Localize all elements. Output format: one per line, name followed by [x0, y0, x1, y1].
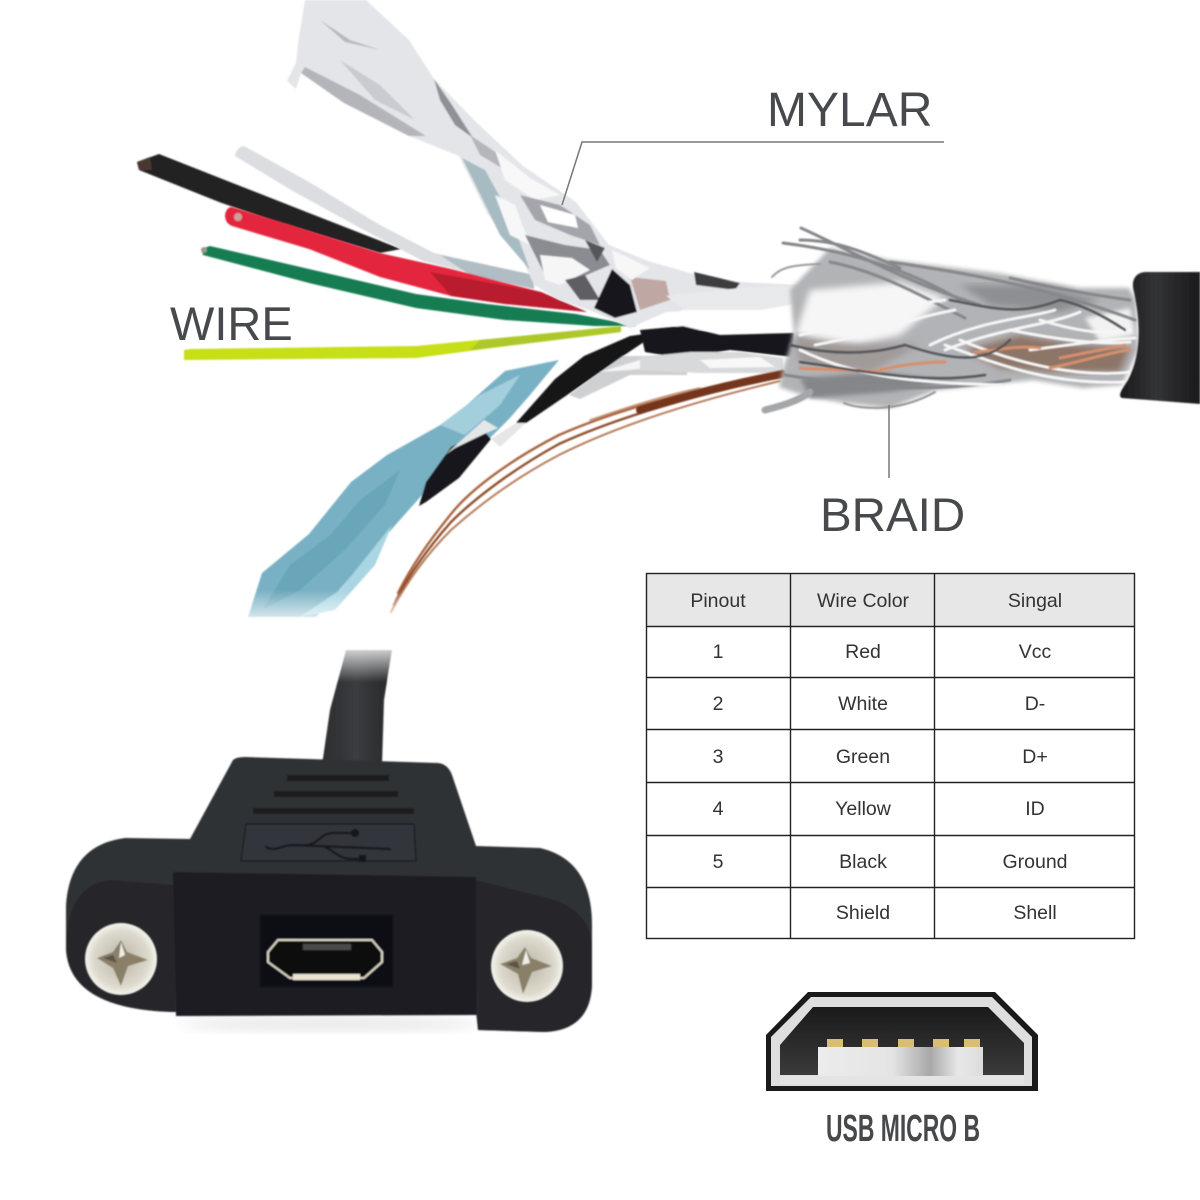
label: MYLAR — [562, 84, 944, 205]
label: USB MICRO B: USB MICRO B — [826, 1108, 980, 1150]
row 5: Black — [839, 851, 887, 873]
cable jacket — [1120, 272, 1200, 404]
row 6: Shell — [1013, 902, 1057, 924]
micro usb socket — [260, 915, 393, 987]
leader line: MYLAR — [562, 142, 944, 205]
foil: second black strip — [516, 332, 659, 423]
row 6 — [836, 902, 1057, 924]
row 4: 4 — [713, 798, 724, 820]
foil: creases — [301, 67, 426, 136]
connector shadow — [180, 1018, 480, 1030]
screw: left — [85, 923, 157, 995]
wire: red — [225, 207, 587, 312]
row 5: Ground — [1002, 851, 1068, 873]
row 4: Yellow — [835, 798, 892, 820]
header row — [690, 590, 1062, 612]
port pins — [827, 1039, 980, 1047]
icon: usb trident — [266, 830, 390, 861]
foil: blue-backed lower shield — [248, 332, 687, 617]
photo: panel mount connector — [66, 640, 592, 1032]
label: BRAID: BRAID — [820, 489, 965, 542]
row 2: White — [838, 693, 888, 715]
port cavity — [780, 1007, 1024, 1075]
foil: first black strip — [419, 431, 491, 506]
wire: black — [137, 154, 401, 253]
connector body — [66, 757, 592, 1032]
foil: black crumple — [594, 269, 637, 318]
row 6: Shield — [836, 902, 890, 924]
row 3: Green — [836, 746, 890, 768]
row 1: 1 — [713, 641, 723, 663]
header row: Wire Color — [817, 590, 910, 612]
row 4: ID — [1025, 798, 1045, 820]
row 5 — [713, 851, 1068, 873]
row 3 — [713, 746, 1048, 768]
port outline — [766, 992, 1038, 1091]
leader line: BRAID — [888, 405, 890, 478]
icon: USB Micro B port diagram — [766, 992, 1038, 1091]
row 1: Red — [845, 641, 881, 663]
row 1 — [713, 641, 1051, 663]
port metal shell — [771, 997, 1032, 1086]
front plate — [173, 872, 477, 1016]
foil: band under the crumple — [662, 310, 786, 330]
label: WIRE: WIRE — [170, 297, 293, 350]
row 5: 5 — [713, 851, 724, 873]
row 3: 3 — [713, 746, 723, 768]
header row: Pinout — [690, 590, 746, 612]
port tongue — [818, 1047, 983, 1083]
row 2: D- — [1025, 693, 1045, 715]
braid: tinned copper shield — [765, 228, 1138, 410]
pinout table — [646, 573, 1134, 938]
table header background — [646, 573, 1134, 626]
screw: right — [491, 930, 563, 1002]
label: MYLAR: MYLAR — [767, 84, 932, 137]
row 2 — [713, 693, 1045, 715]
header row: Singal — [1008, 590, 1062, 612]
row 1: Vcc — [1019, 641, 1051, 663]
wire: white — [235, 146, 534, 289]
row 4 — [713, 798, 1045, 820]
row 2: 2 — [713, 693, 723, 715]
row 3: D+ — [1022, 746, 1048, 768]
grip ribs — [253, 775, 414, 814]
photo fade at bottom — [200, 590, 460, 630]
photo: stripped shielded cable — [137, 0, 1200, 630]
wire: green — [201, 246, 637, 326]
connector cable — [322, 640, 400, 765]
wire: yellow — [184, 326, 621, 360]
logo recess — [241, 824, 416, 861]
foil: mylar shield — [287, 0, 819, 373]
wire: copper drain — [391, 372, 783, 612]
